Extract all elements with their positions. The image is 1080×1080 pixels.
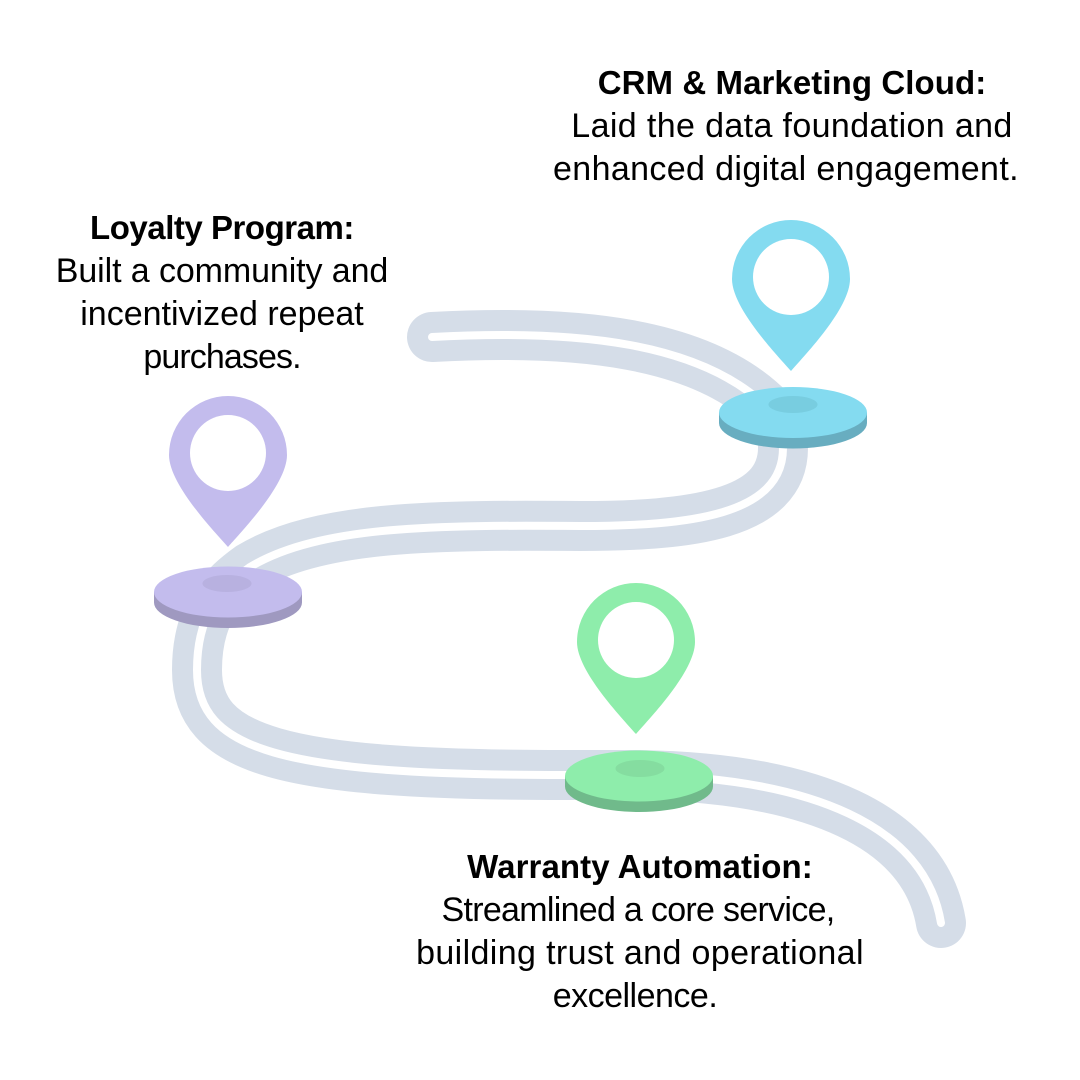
text: Warranty Automation: Warranty Automation: — [467, 848, 813, 885]
text: Warranty Automation — [416, 848, 864, 1015]
text: Loyalty Program: purchases. — [143, 338, 301, 376]
text: Warranty Automation: Streamlined a core service, — [441, 891, 835, 929]
text: CRM & Marketing Cloud: CRM & Marketing Cloud: — [598, 64, 986, 101]
text: Loyalty Program: incentivized repeat — [80, 295, 364, 333]
road — [197, 335, 941, 923]
text: CRM & Marketing Cloud: Laid the data foundation and — [571, 107, 1013, 145]
pin: green — [577, 583, 695, 734]
platform: purple — [154, 566, 302, 628]
text: Warranty Automation: excellence. — [553, 977, 717, 1015]
text: CRM & Marketing Cloud: enhanced digital engagement. — [553, 150, 1019, 188]
platform: blue — [719, 387, 867, 448]
pin: blue — [732, 220, 850, 371]
text: Warranty Automation: building trust and operational — [416, 934, 864, 972]
pin: purple — [169, 396, 287, 547]
text: Loyalty Program — [56, 209, 388, 376]
platform: green — [565, 750, 713, 812]
text: Loyalty Program: Built a community and — [56, 252, 388, 290]
text: Loyalty Program: Loyalty Program: — [90, 209, 354, 246]
text: CRM & Marketing Cloud — [553, 64, 1019, 188]
